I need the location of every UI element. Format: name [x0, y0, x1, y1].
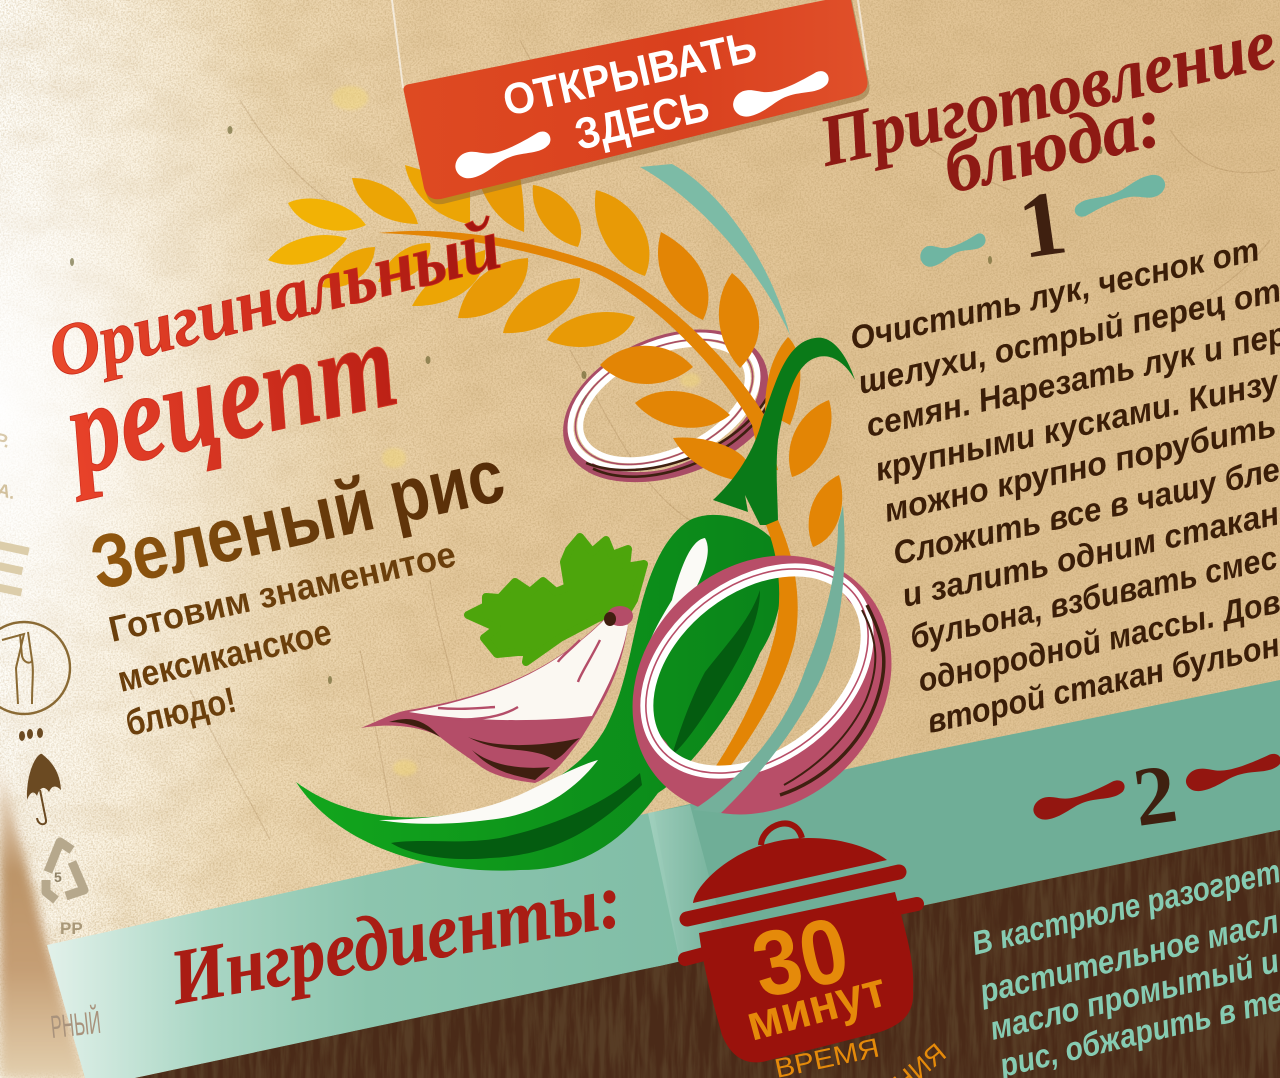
- heading line 2: рецепт: [47, 294, 408, 503]
- icon: umbrella with rain: [19, 728, 61, 824]
- step 2 text: [968, 852, 1280, 1078]
- tab label line 2: ЗДЕСЬ: [570, 81, 714, 160]
- wheat leaves, orange: [458, 175, 649, 347]
- intro text: мексиканское: [114, 611, 335, 700]
- heading line 1: Оригинальный: [40, 203, 508, 394]
- icon: red spoon left: [1031, 779, 1128, 822]
- wheat leaves, amber: [322, 165, 485, 306]
- subheading: green rice: Зеленый рис: [83, 433, 512, 607]
- wheat leaves, deep orange: [600, 232, 842, 547]
- icon: teal spoon right: [1071, 172, 1168, 218]
- illustration: wheat ear: [268, 165, 842, 547]
- orange stem over pepper: [712, 520, 798, 778]
- step 1 text: Очистить лук, чеснок от: [847, 230, 1263, 357]
- icon: spoon left: [452, 130, 555, 181]
- step 1 text: [847, 230, 1280, 740]
- illustration: chili pepper: [296, 338, 855, 871]
- step 1 text: можно крупно порубить: [881, 406, 1279, 529]
- intro text: [105, 533, 459, 744]
- pepper stem: [713, 338, 855, 525]
- wood panel: [130, 820, 1280, 1078]
- pot handle: [761, 823, 802, 845]
- heading: original recipe: [40, 203, 508, 503]
- cooking pot: [685, 823, 917, 1062]
- illustration: garlic clove: [361, 606, 633, 783]
- step 2 marker: 2: [1128, 747, 1182, 845]
- step 2 marker: [1031, 747, 1280, 845]
- pot lid: [693, 838, 887, 903]
- tab label line 1: ОТКРЫВАТЬ: [499, 22, 761, 126]
- illustration: lower teal ribbon: [693, 505, 845, 813]
- tab: open here: [392, 0, 870, 204]
- icon: spoon right: [730, 69, 833, 119]
- icon: red spoon right: [1184, 753, 1280, 793]
- wheat leaves, yellow tips: [268, 199, 366, 265]
- plastic flap behind tab: [392, 0, 868, 88]
- step 1 text: крупными кусками. Кинзу: [872, 362, 1280, 488]
- partial word on teal band: РНЫЙ: [49, 1004, 102, 1045]
- tab shadow: [406, 0, 870, 204]
- blurred surroundings outside the pack: [0, 762, 85, 1078]
- wheat stem: [379, 231, 778, 470]
- illustration: upper teal ribbon: [640, 164, 790, 335]
- fold highlight: [648, 805, 730, 962]
- icon: recycling mark: [46, 842, 84, 938]
- illustration: cilantro leaf: [468, 537, 644, 662]
- pack edge lettering and icons: [0, 429, 102, 1045]
- minutes label: минут: [740, 961, 892, 1052]
- intro text: Готовим знаменитое: [105, 533, 459, 650]
- illustration: large onion ring: [606, 527, 908, 815]
- icon: teal spoon left: [918, 232, 989, 269]
- intro text: блюдо!: [122, 679, 240, 744]
- tab shape: [404, 0, 868, 199]
- minutes number: 30: [744, 898, 857, 1018]
- pepper body: [296, 515, 783, 871]
- heading: ingredients: Ингредиенты:: [163, 856, 628, 1021]
- icon: recycling mark: 5: [54, 869, 62, 885]
- pot rim: [687, 872, 899, 919]
- icon: glass and fork: [0, 622, 70, 714]
- teal band, right panel: [654, 680, 1280, 960]
- step 1 marker: 1: [1013, 170, 1072, 278]
- heading: preparation: блюда:: [937, 81, 1169, 209]
- cooking time caption: [772, 1032, 952, 1078]
- teal band, left panel: [47, 812, 690, 1078]
- pot body: [699, 892, 913, 1062]
- icon: recycling mark: PP: [60, 919, 83, 938]
- illustration: upper onion ring: [545, 305, 788, 509]
- step 1 marker: [918, 170, 1168, 278]
- pot side handles: [685, 904, 917, 959]
